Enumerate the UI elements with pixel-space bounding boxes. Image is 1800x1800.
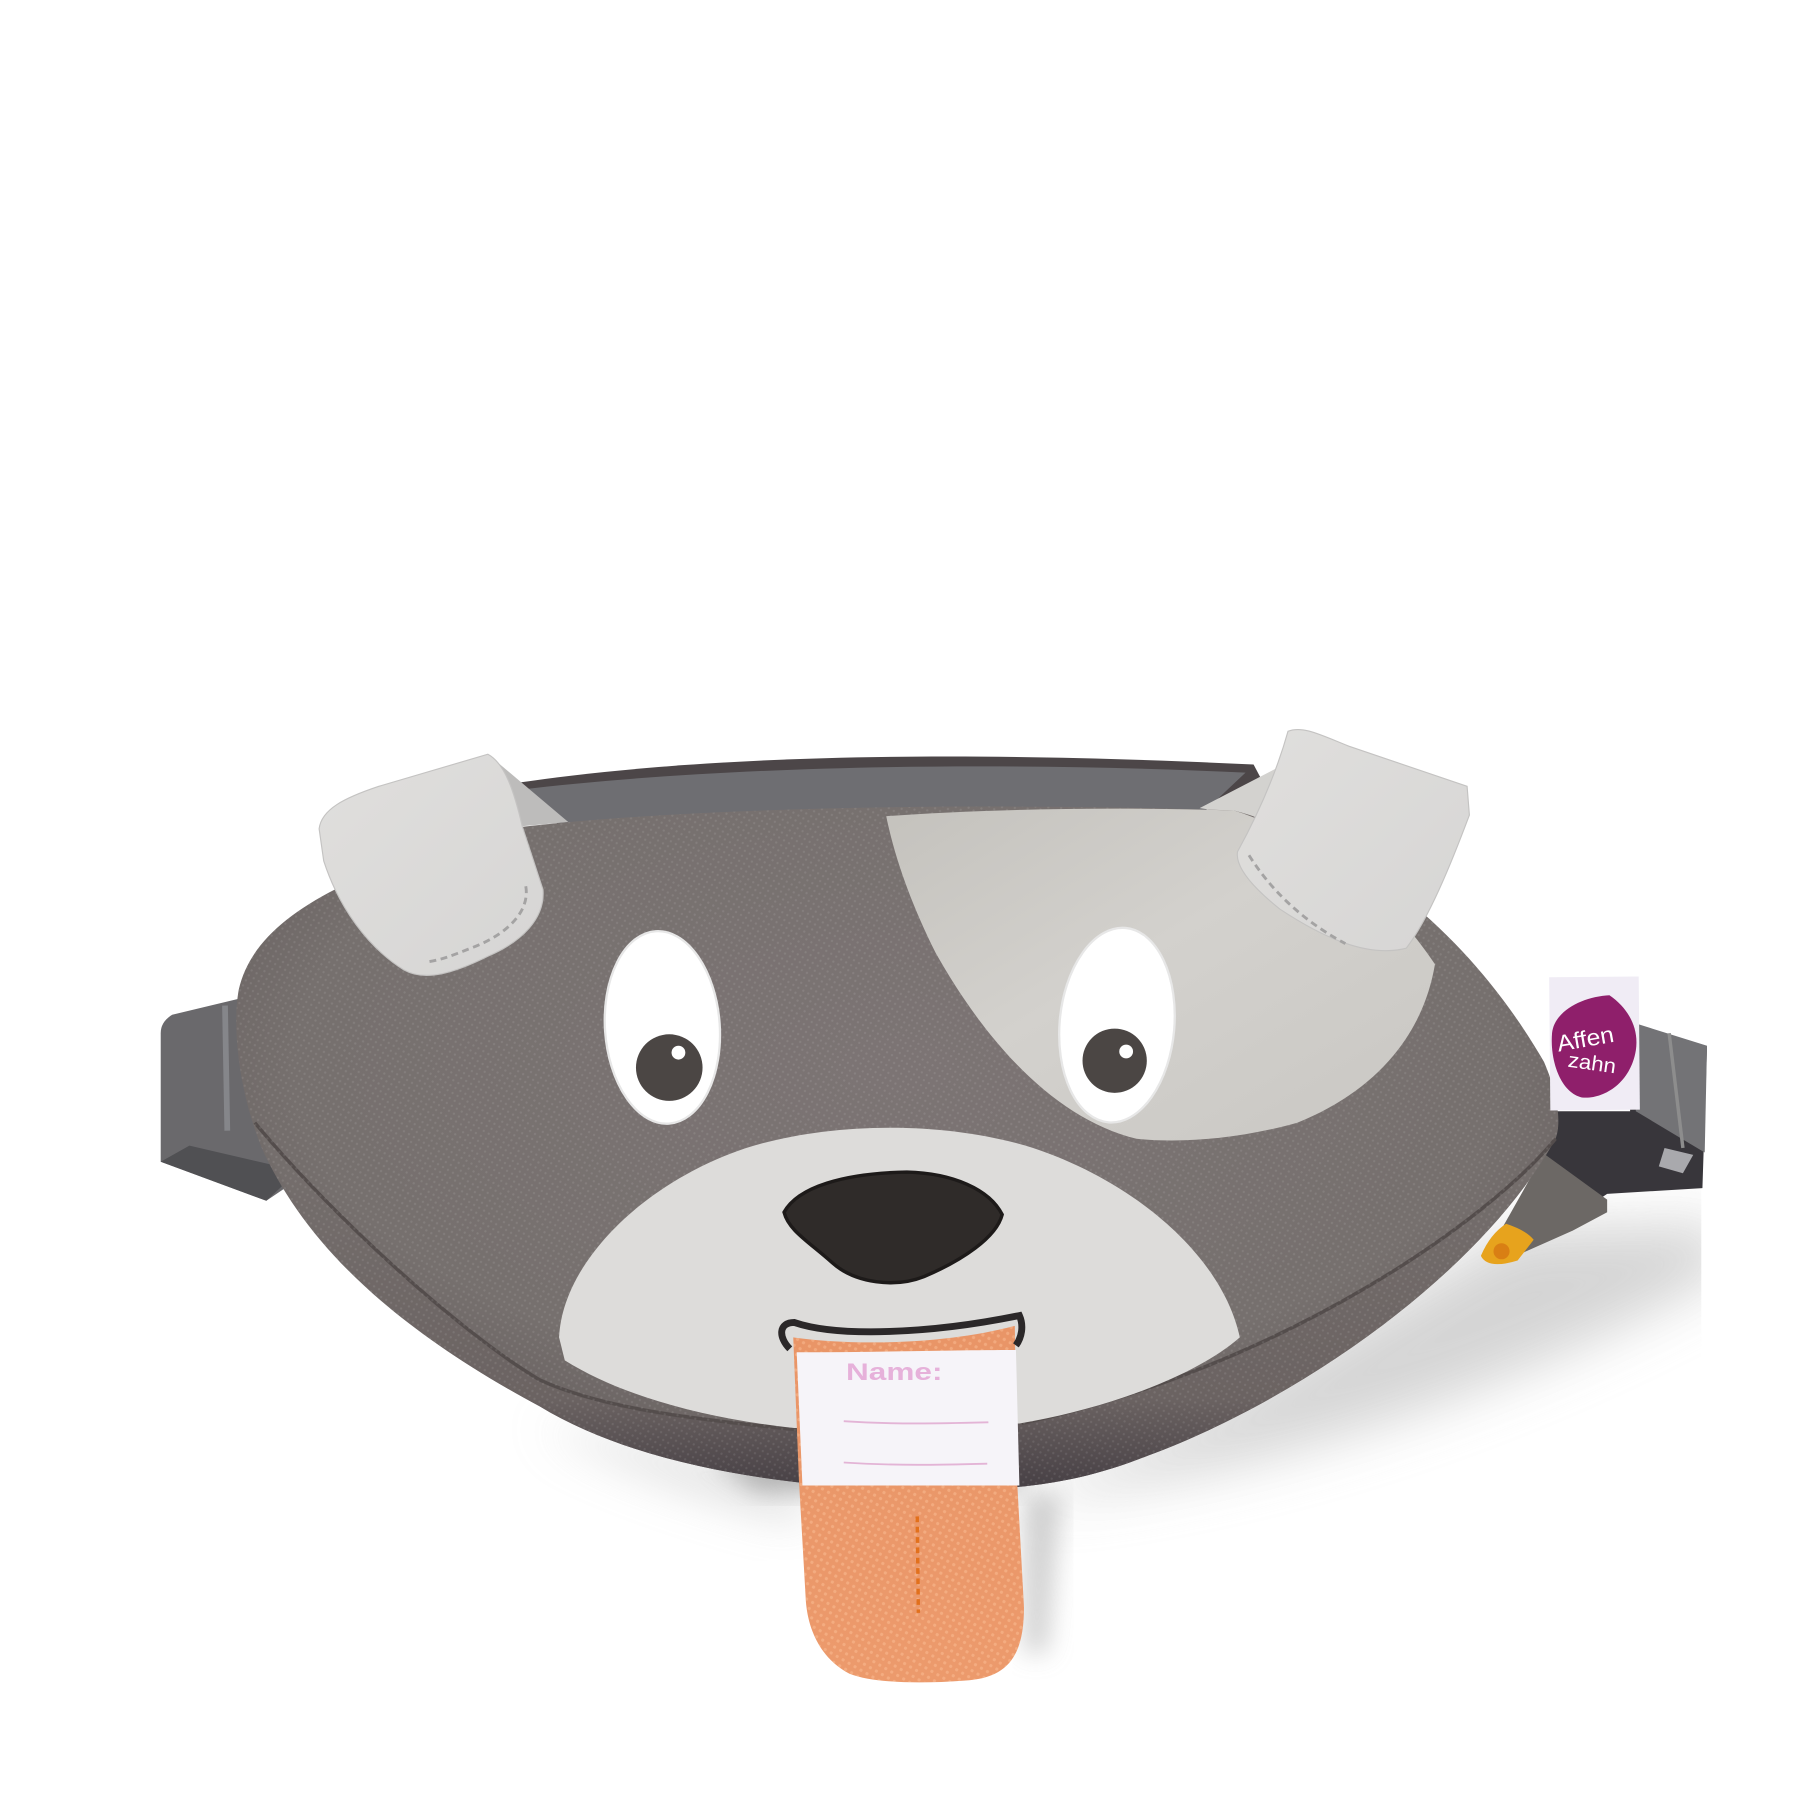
right eye	[1051, 923, 1183, 1127]
writing lines	[844, 1421, 988, 1465]
left eye	[598, 927, 726, 1128]
logo text: Affen	[1555, 1021, 1616, 1057]
left ear	[319, 754, 543, 975]
ground shadow	[540, 1223, 1722, 1653]
lower gusset band	[255, 1123, 1555, 1490]
tongue name tag	[782, 1316, 1024, 1682]
belt strap left	[161, 987, 344, 1201]
stitching	[917, 1516, 918, 1613]
right ear	[1237, 729, 1469, 951]
nose	[784, 1172, 1002, 1283]
logo blob	[1552, 995, 1636, 1098]
Affenzahn brand label	[1549, 977, 1640, 1110]
muzzle	[559, 1128, 1240, 1428]
name text: Name:	[846, 1359, 942, 1386]
ear flap backs	[488, 754, 1293, 827]
bag body	[236, 807, 1558, 1490]
name label	[797, 1350, 1019, 1485]
Affenzahn brand label: zahn	[1567, 1049, 1617, 1078]
product photo: dog-face belt bag	[160, 729, 1707, 1682]
belt strap right with buckle	[1481, 1022, 1707, 1264]
mouth line	[782, 1316, 1022, 1349]
light grey eye patch	[886, 809, 1435, 1140]
zipper opening	[517, 757, 1274, 829]
